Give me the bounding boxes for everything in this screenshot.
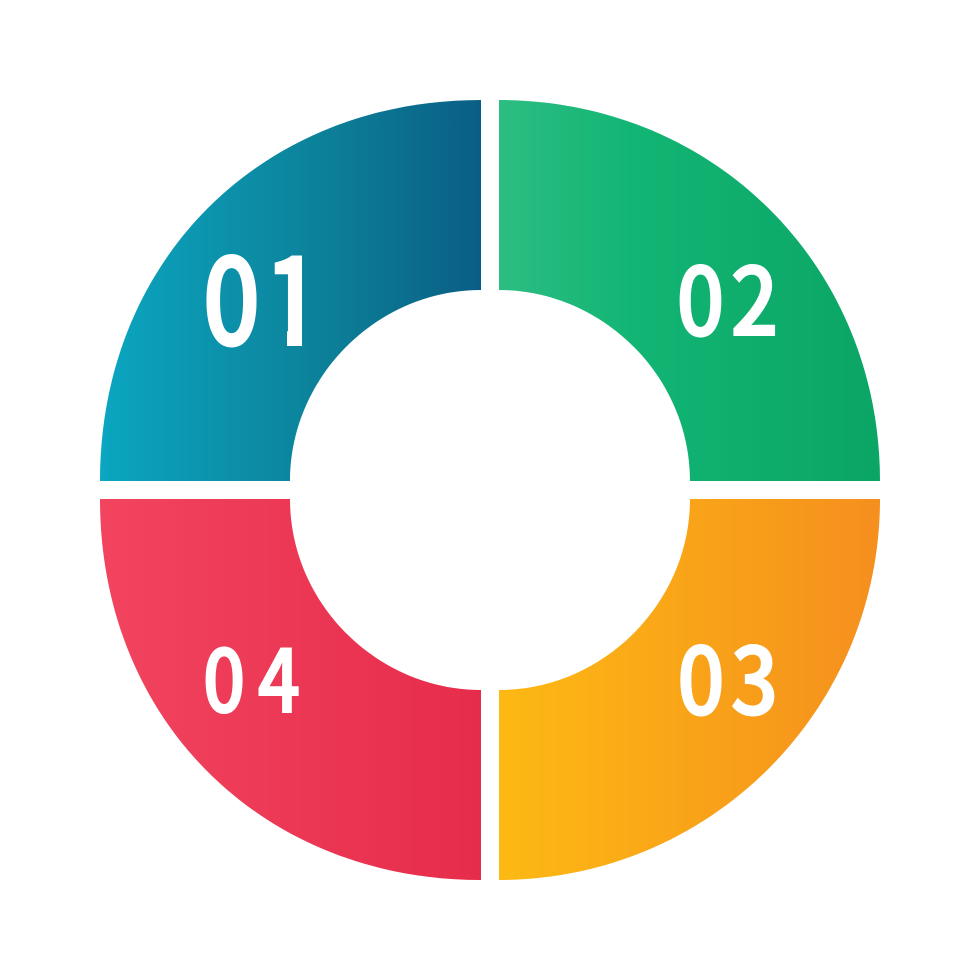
panel: segment 04 [100, 499, 481, 880]
number 01 [206, 254, 302, 348]
number 01: 1 [264, 205, 321, 381]
number 01: 0 [203, 205, 260, 381]
number 03: 03 [677, 608, 778, 741]
number 04: 04 [203, 613, 300, 738]
panel: segment 03 [499, 499, 880, 880]
panel: segment 01 [100, 100, 481, 481]
panel: segment 02 [499, 100, 880, 481]
number 02: 02 [677, 228, 778, 362]
donut chart infographic [100, 100, 880, 880]
